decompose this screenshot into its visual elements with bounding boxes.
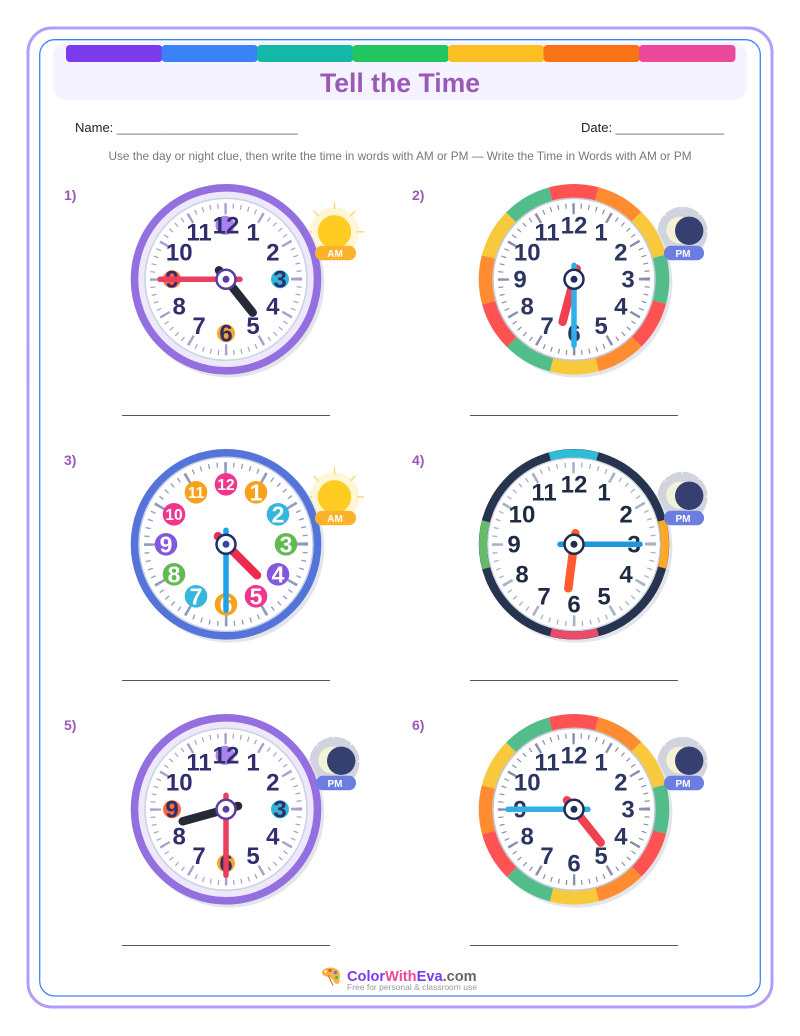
clock numbers: 5 [246,313,260,340]
numbered badges: 9 [160,531,172,557]
clock numbers: 12 [213,742,239,769]
numbered badges: 8 [168,561,181,587]
clock numbers: 10 [166,769,193,796]
clock numbers: 10 [509,501,535,528]
clock numbers: 4 [266,823,280,850]
clock numbers: 1 [597,479,611,506]
clock hands [560,533,640,588]
clock numbers: 5 [594,313,608,340]
clock numbers: 2 [266,239,279,266]
title: Tell the Time [320,68,480,98]
numbered badges: 12 [217,477,235,494]
clock numbers: 3 [627,531,641,558]
clock numbers: 3 [621,266,635,293]
answer line 5 [122,944,330,946]
icon: moon [658,207,708,257]
numbered badges: 10 [165,507,183,524]
clock numbers: 9 [513,796,527,823]
clock hands [160,270,253,313]
clock numbers [513,742,635,877]
PM pill: PM [676,514,690,525]
clock numbers: 7 [192,843,206,870]
clock numbers: 1 [594,749,608,776]
clock numbers: 7 [540,843,554,870]
clock numbers: 4 [266,293,280,320]
clock 4 [463,433,708,656]
clock numbers: 6 [219,850,233,877]
clock face [466,172,682,387]
clock numbers: 1 [246,749,260,776]
question label 3: 3) [64,452,76,468]
number badges [163,746,289,872]
answer line 6 [470,944,678,946]
clock numbers: 11 [531,479,557,506]
clock hands [216,530,257,610]
clock numbers: 7 [540,313,554,340]
clock numbers: 4 [614,823,628,850]
PM pill: PM [676,779,690,790]
clock numbers: 12 [561,471,587,498]
clock hands [183,795,238,875]
numbered badges: 1 [250,479,263,505]
numbered badges: 6 [220,591,232,617]
clock numbers: 11 [186,749,212,776]
clock numbers: 4 [614,293,628,320]
icon: sun [305,467,364,521]
clock 1 [134,187,364,378]
PM pill [664,776,704,790]
numbered badges: 5 [250,583,263,609]
AM pill: AM [327,249,343,260]
footer note: Free for personal & classroom use [347,982,477,992]
PM pill: PM [328,779,342,790]
clock numbers: 10 [514,769,541,796]
clock numbers: 3 [621,796,635,823]
PM pill [664,511,704,525]
AM pill [315,511,356,525]
numbered badges: 4 [272,561,285,587]
clock numbers: 12 [561,742,587,769]
answer line 4 [470,680,678,682]
numbered badges [155,473,297,617]
number badges [163,216,289,342]
clock numbers: 11 [186,219,212,246]
clock numbers: 8 [173,293,186,320]
question label 1: 1) [64,187,76,203]
clock numbers: 11 [534,219,560,246]
icon: moon [658,472,708,522]
clock numbers: 1 [246,219,260,246]
clock face [134,452,324,643]
clock numbers: 12 [561,212,587,239]
numbered badges: 2 [272,501,284,527]
clock face [466,702,682,917]
clock numbers: 6 [567,850,581,877]
PM pill [664,246,704,260]
clock numbers: 8 [521,823,534,850]
question label 6: 6) [412,717,424,733]
answer line 1 [122,414,330,416]
clock 3 [134,452,364,643]
clock numbers: 2 [614,239,627,266]
clock numbers [165,742,287,877]
clock numbers: 1 [594,219,608,246]
clock numbers: 8 [521,293,534,320]
clock 5 [134,717,360,908]
name field: Name: _________________________ [75,120,298,135]
clock numbers: 6 [567,591,581,618]
clock numbers: 3 [273,266,287,293]
question label 2: 2) [412,187,424,203]
clock numbers: 6 [567,320,581,347]
icon: moon [310,737,360,787]
AM pill [315,246,356,260]
clock numbers: 8 [515,561,529,588]
clock 2 [466,172,708,387]
numbered badges: 11 [188,485,205,502]
clock numbers: 2 [266,769,279,796]
instructions: Use the day or night clue, then write the time in words with AM or PM — Write the Time in Words with AM or PM [108,149,692,163]
clock numbers: 12 [213,212,239,239]
numbered badges: 7 [190,583,202,609]
clock numbers: 5 [594,843,608,870]
answer line 3 [122,680,330,682]
clock hands [563,265,584,345]
date field: Date: _______________ [581,120,725,135]
question label 4: 4) [412,452,424,468]
clock numbers: 7 [192,313,206,340]
clock numbers: 10 [514,239,541,266]
rainbow bar [66,45,736,62]
clock numbers: 9 [165,266,179,293]
icon: moon [658,737,708,787]
clock face [134,187,324,378]
clock face [134,717,324,908]
clock numbers: 4 [619,561,633,588]
clock numbers [165,212,287,347]
clock numbers: 6 [219,320,233,347]
numbered badges: 3 [280,531,292,557]
PM pill: PM [676,249,690,260]
clock numbers: 7 [537,583,551,610]
clock 6 [466,702,708,917]
AM pill: AM [327,514,343,525]
clock hands [508,800,601,843]
clock numbers: 2 [619,501,633,528]
clock numbers: 3 [273,796,287,823]
clock numbers: 8 [173,823,186,850]
clock numbers: 9 [513,266,527,293]
clock numbers: 5 [246,843,260,870]
clock numbers [513,212,635,347]
icon: sun [305,202,364,256]
icon: artist palette [322,968,340,986]
clock numbers: 5 [597,583,611,610]
header panel [53,42,747,100]
answer line 2 [470,414,678,416]
clock face [463,433,685,656]
PM pill [316,776,356,790]
question label 5: 5) [64,717,76,733]
clock numbers: 9 [507,531,521,558]
clock numbers: 2 [614,769,627,796]
clock numbers: 10 [166,239,193,266]
clock numbers: 9 [165,796,179,823]
clock numbers: 11 [534,749,560,776]
footer brand: ColorWithEva.com [347,969,477,985]
clock numbers [507,471,641,618]
